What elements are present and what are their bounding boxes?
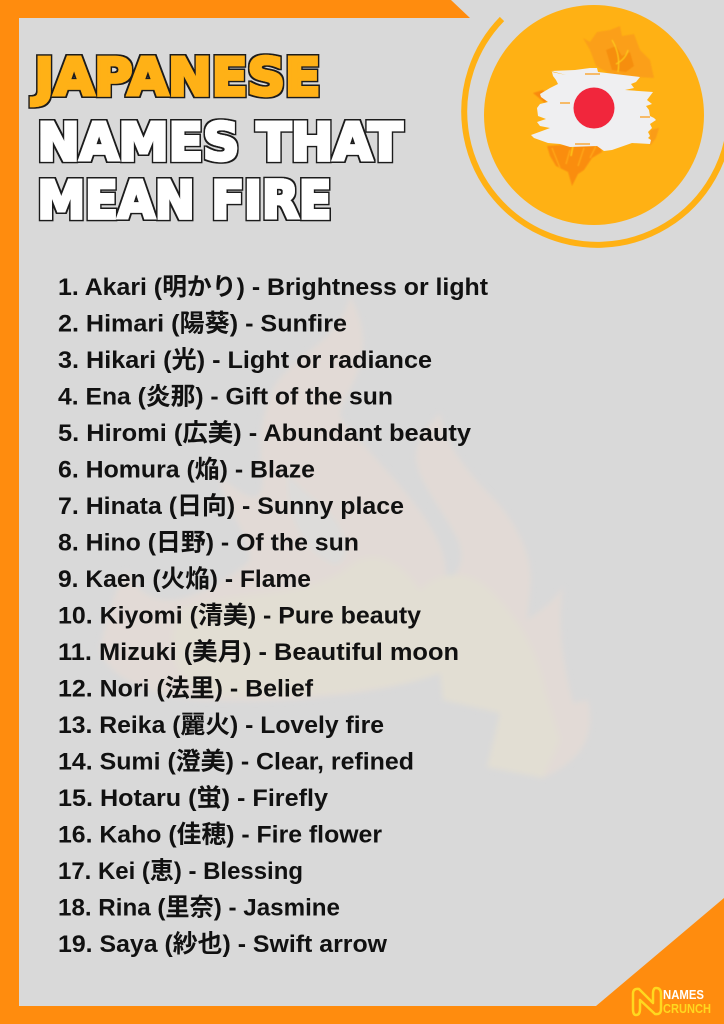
list of names: 18. Rina (里奈) - Jasmine (58, 894, 340, 922)
list of names: 11. Mizuki (美月) - Beautiful moon (58, 638, 459, 666)
title line: Japanese: JAPANESE (31, 48, 320, 108)
list of names: 10. Kiyomi (清美) - Pure beauty (58, 602, 421, 630)
logo: Names Crunch (633, 988, 711, 1016)
list of names: 4. Ena (炎那) - Gift of the sun (58, 384, 393, 410)
list of names: 12. Nori (法里) - Belief (58, 674, 314, 702)
list of names: 16. Kaho (佳穂) - Fire flower (58, 820, 382, 848)
list of names: 19. Saya (紗也) - Swift arrow (58, 930, 388, 958)
background flame watermark (100, 296, 590, 778)
list of names: 1. Akari (明かり) - Brightness or light (58, 274, 488, 301)
list of names (58, 274, 488, 958)
list of names: 9. Kaen (火焔) - Flame (58, 565, 311, 593)
decorative ring (464, 19, 724, 245)
title (31, 48, 403, 231)
list of names: 7. Hinata (日向) - Sunny place (58, 492, 404, 520)
title line: Names That: NAMES THAT (38, 113, 403, 173)
list of names: 8. Hino (日野) - Of the sun (58, 530, 359, 556)
brush stroke flag field (531, 68, 656, 151)
list of names: 17. Kei (恵) - Blessing (58, 857, 303, 885)
list of names: 2. Himari (陽葵) - Sunfire (58, 310, 347, 338)
list of names: 14. Sumi (澄美) - Clear, refined (58, 748, 414, 776)
logo: Names Crunch: NAMES (663, 988, 704, 1002)
list of names: 13. Reika (麗火) - Lovely fire (58, 712, 384, 739)
list of names: 5. Hiromi (広美) - Abundant beauty (58, 419, 471, 447)
logo: Names Crunch: CRUNCH (663, 1001, 711, 1016)
list of names: 15. Hotaru (蛍) - Firefly (58, 784, 328, 812)
list of names: 3. Hikari (光) - Light or radiance (58, 346, 432, 374)
flame splashes behind flag (533, 26, 659, 186)
list of names: 6. Homura (焔) - Blaze (58, 456, 315, 484)
icon: Japan flag on yellow circle (484, 5, 704, 225)
title line: Mean Fire: MEAN FIRE (38, 171, 332, 231)
icon: N mark (633, 988, 661, 1015)
red sun (574, 88, 614, 128)
